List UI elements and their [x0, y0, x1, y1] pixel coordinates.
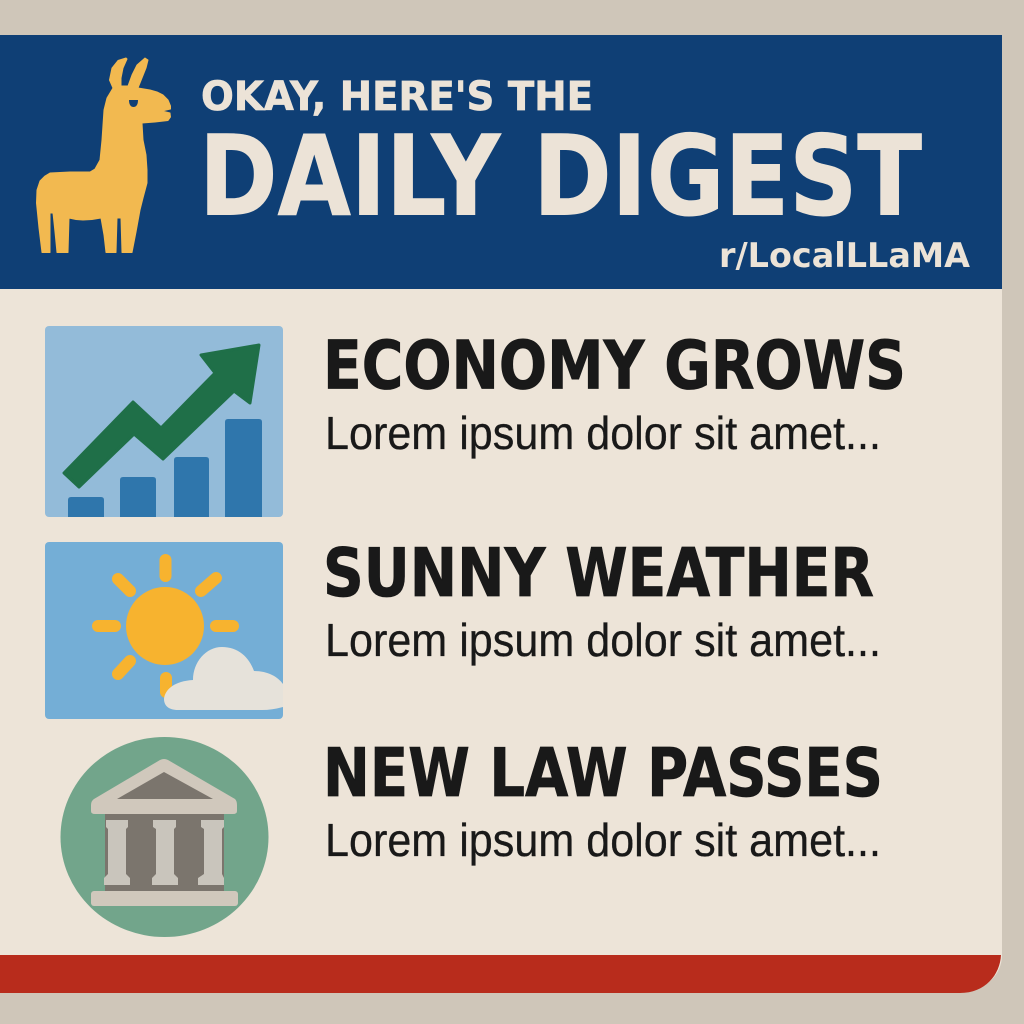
- heading: law: NEW LAW PASSES: [323, 734, 883, 812]
- footer: red band: [0, 955, 1001, 993]
- icon: sun: [98, 560, 233, 692]
- icon: growth chart: [45, 326, 283, 517]
- courthouse roof: [91, 759, 237, 814]
- icon: llama eye: [129, 100, 138, 107]
- panel: law story: [60, 734, 883, 937]
- courthouse base: [91, 891, 238, 906]
- icon: green arrow: [64, 345, 259, 487]
- icon: courthouse: [60, 737, 268, 937]
- icon: sun and cloud: [45, 542, 283, 719]
- text: law body: Lorem ipsum dolor sit amet...: [325, 814, 881, 866]
- text: economy body: Lorem ipsum dolor sit amet...: [325, 407, 881, 459]
- chart bars: [68, 419, 262, 517]
- panel: weather story: [45, 534, 881, 719]
- courthouse columns: [104, 820, 224, 885]
- heading: economy: ECONOMY GROWS: [323, 326, 906, 404]
- panel: economy story: [45, 326, 906, 517]
- courthouse wall: [105, 812, 224, 891]
- icon: cloud: [164, 647, 283, 710]
- heading: weather: SUNNY WEATHER: [323, 534, 874, 612]
- heading: title: DAILY DIGEST: [199, 112, 922, 242]
- text: weather body: Lorem ipsum dolor sit amet...: [325, 614, 881, 666]
- panel: header banner: [0, 35, 1002, 289]
- heading: kicker: OKAY, HERE'S THE: [201, 74, 593, 120]
- text: subreddit: r/LocalLLaMA: [719, 236, 971, 276]
- courthouse pediment: [117, 772, 213, 799]
- icon: llama: [36, 58, 170, 252]
